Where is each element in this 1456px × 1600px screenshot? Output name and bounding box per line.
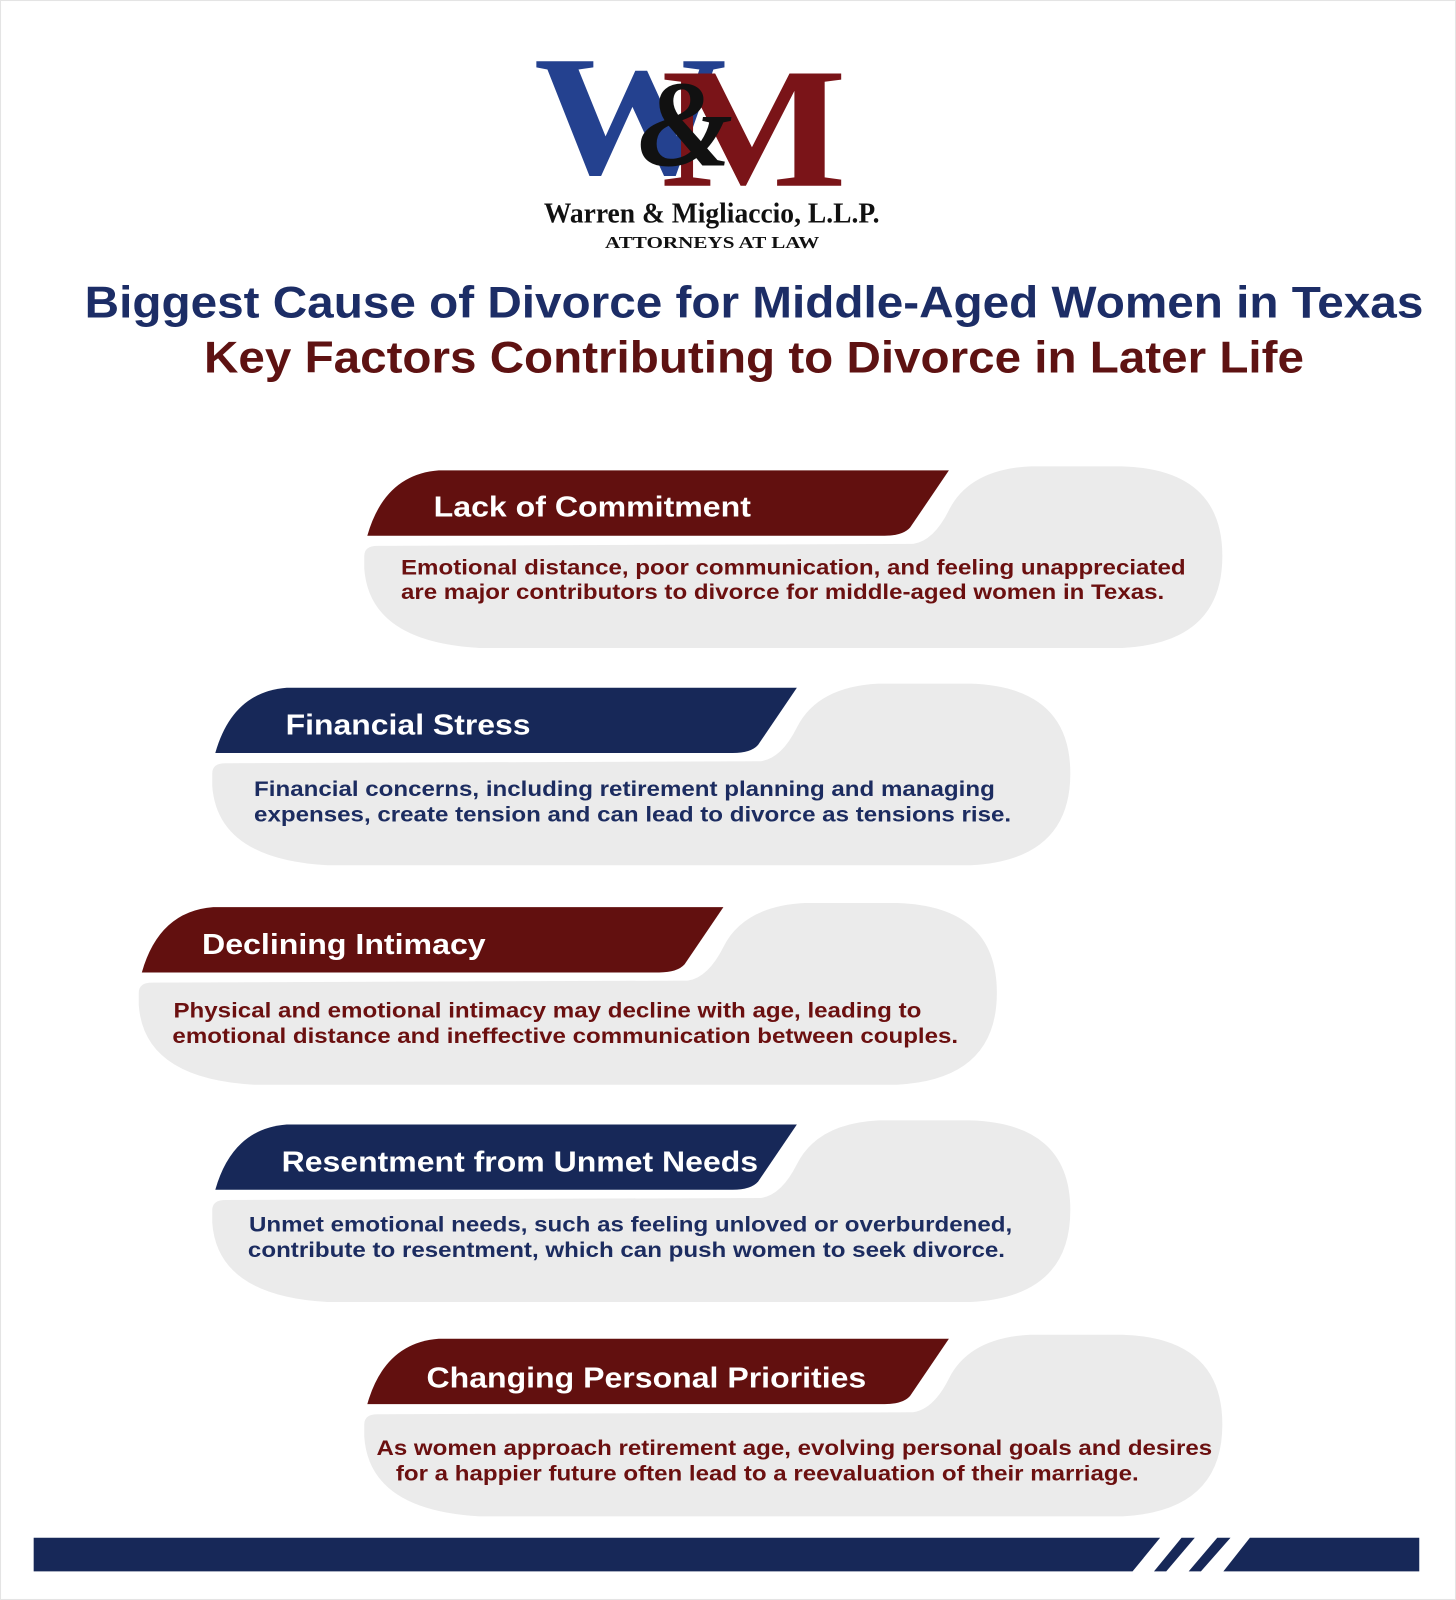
- logo: M: [661, 34, 847, 224]
- panel: changing priorities: Changing Personal Priorities: [426, 1363, 866, 1395]
- panel: declining intimacy: [139, 903, 997, 1085]
- logo: [534, 21, 880, 252]
- panel: declining intimacy: Declining Intimacy: [202, 929, 486, 961]
- logo: Warren & Migliaccio, L.L.P.: [544, 198, 880, 229]
- panel: changing priorities: As women approach retirement age, evolving personal goals and desires: [376, 1436, 1212, 1460]
- panel: lack of commitment: [364, 466, 1222, 648]
- panel: changing priorities: for a happier future often lead to a reevaluation of their marriage.: [396, 1462, 1139, 1486]
- subtitle: Key Factors Contributing to Divorce in Later Life: [204, 331, 1304, 382]
- panel: financial stress: Financial Stress: [286, 710, 531, 742]
- footer bar: [34, 1538, 1419, 1571]
- panel: financial stress: expenses, create tension and can lead to divorce as tensions rise.: [254, 802, 1011, 826]
- panel: resentment: Resentment from Unmet Needs: [282, 1146, 758, 1178]
- panel: financial stress: Financial concerns, including retirement planning and managing: [254, 777, 995, 801]
- panel: lack of commitment: Lack of Commitment: [434, 491, 751, 523]
- logo: ATTORNEYS AT LAW: [605, 233, 820, 252]
- panel: lack of commitment: Emotional distance, poor communication, and feeling unappreciated: [401, 555, 1186, 579]
- panel: declining intimacy: Physical and emotional intimacy may decline with age, leading to: [173, 998, 921, 1022]
- panel: resentment: [212, 1120, 1070, 1302]
- panel: declining intimacy: emotional distance and ineffective communication between couples.: [172, 1024, 958, 1048]
- title: Biggest Cause of Divorce for Middle-Aged Women in Texas: [85, 276, 1423, 327]
- logo: W: [534, 21, 727, 211]
- panel: financial stress: [212, 684, 1070, 865]
- panel: resentment: Unmet emotional needs, such as feeling unloved or overburdened,: [249, 1213, 1012, 1237]
- logo: &: [638, 57, 733, 192]
- panel: lack of commitment: are major contributors to divorce for middle-aged women in Texas.: [401, 580, 1164, 604]
- panel: changing priorities: [364, 1335, 1222, 1516]
- panel: resentment: contribute to resentment, which can push women to seek divorce.: [248, 1238, 1005, 1262]
